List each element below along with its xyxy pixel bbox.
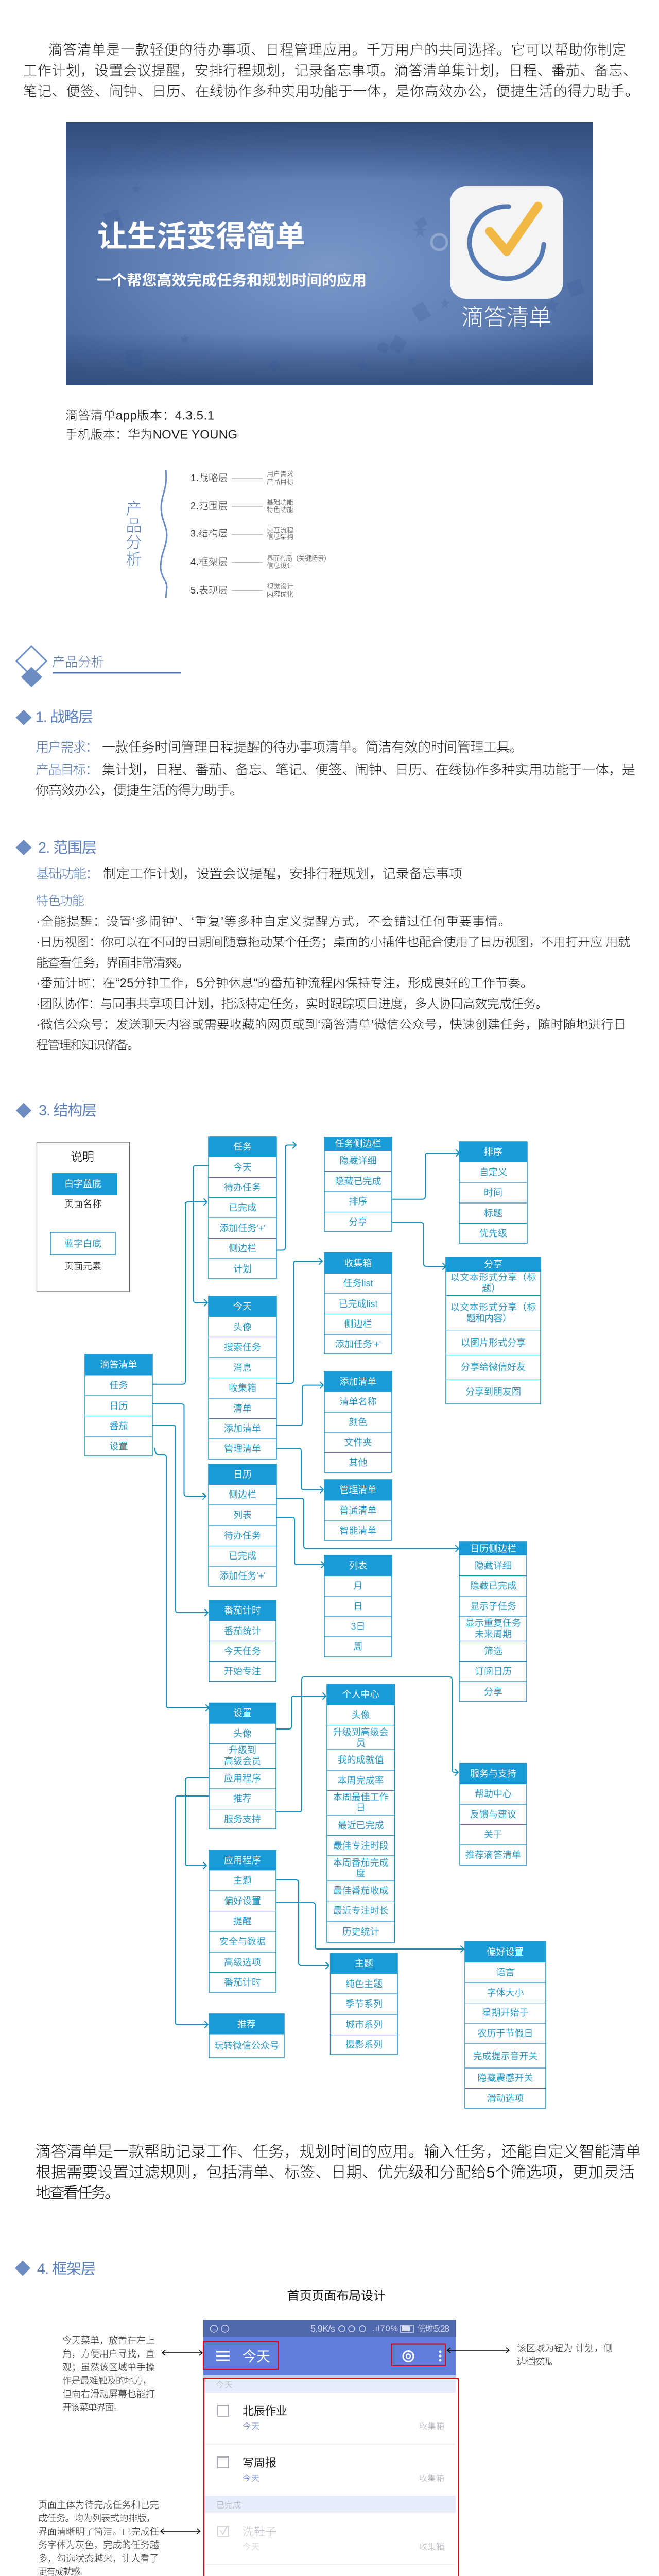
box: 服务与支持: 关于 xyxy=(484,1829,502,1840)
text: 范围层 content: 特色功能 xyxy=(36,894,84,908)
more dots xyxy=(439,2350,442,2362)
annotation: 页面主体: 页面主体为待完成任务和已完 xyxy=(38,2500,159,2510)
box: 排序: 优先级 xyxy=(479,1228,507,1239)
box: 设置: 升级到 xyxy=(229,1745,256,1755)
paragraph: 结构层 summary xyxy=(36,2143,641,2202)
box: 服务与支持: 反馈与建议 xyxy=(470,1809,516,1820)
box: 服务与支持 xyxy=(460,1764,527,1865)
box: 个人中心: 最近专注时长 xyxy=(333,1906,389,1916)
title: 首页页面布局设计: 首页页面布局设计 xyxy=(287,2289,386,2303)
intro paragraph xyxy=(23,42,639,99)
box: 日历侧边栏: 分享 xyxy=(484,1687,502,1697)
box: 个人中心: 日 xyxy=(356,1803,366,1813)
box: 番茄计时 xyxy=(209,1600,276,1682)
arrow: 页面主体 xyxy=(161,2529,200,2534)
box: 个人中心: 度 xyxy=(356,1869,366,1879)
box: 任务侧边栏: 任务侧边栏 xyxy=(335,1139,381,1149)
box: 推荐: 推荐 xyxy=(237,2019,256,2029)
box: 应用程序: 安全与数据 xyxy=(219,1937,266,1947)
text: 范围层 content: 制定工作计划，设置会议提醒，安排行程规划，记录备忘事项 xyxy=(103,866,462,882)
version info: 手机版本：华为NOVE YOUNG xyxy=(65,428,237,442)
box: 番茄计时: 番茄统计 xyxy=(224,1626,261,1636)
arrow: 计划按钮 xyxy=(447,2348,509,2353)
box: 推荐 xyxy=(209,2014,284,2058)
box: 添加清单 xyxy=(324,1371,392,1472)
app icon xyxy=(450,186,563,299)
box: 收集箱: 侧边栏 xyxy=(344,1319,372,1329)
box: 任务侧边栏: 隐藏详细 xyxy=(340,1156,377,1166)
phone: home page: 今天 xyxy=(242,2349,270,2365)
text: 战略层 content: 一款任务时间管理日程提醒的待办事项清单。简洁有效的时间管理工具。 xyxy=(102,739,523,755)
box: 添加清单: 添加清单 xyxy=(340,1377,377,1387)
box: 排序 xyxy=(459,1142,527,1243)
tree items: 交互流程 xyxy=(267,527,293,534)
annotation: 今天菜单: 角，方便用户寻找，直 xyxy=(62,2349,155,2359)
box: 排序: 时间 xyxy=(484,1188,502,1198)
box: 分享: 分享 xyxy=(484,1259,502,1269)
tree items: 信息设计 xyxy=(267,562,293,570)
tree items: 特色功能 xyxy=(267,506,293,513)
tree items: 用户需求 xyxy=(267,470,293,478)
box: 个人中心: 最佳番茄收成 xyxy=(333,1886,389,1896)
box: 主题: 摄影系列 xyxy=(345,2040,383,2050)
text: 战略层 content: 集计划，日程、番茄、备忘、笔记、便签、闹钟、日历、在线协作多种实用功能于一体，是 xyxy=(102,762,635,777)
tree items: 1.战略层 xyxy=(190,473,228,483)
box: 番茄计时: 番茄计时 xyxy=(224,1605,261,1616)
legend box: 说明 xyxy=(71,1150,94,1163)
box: 设置: 推荐 xyxy=(233,1793,252,1804)
highlight boxes xyxy=(203,2342,458,2576)
box: 主题 xyxy=(331,1953,397,2055)
box: 偏好设置: 滑动选项 xyxy=(487,2093,524,2104)
box: 个人中心: 员 xyxy=(356,1738,366,1748)
task: 写周报: 写周报 xyxy=(242,2456,276,2469)
task: 写周报 xyxy=(218,2456,444,2483)
box: 添加清单: 清单名称 xyxy=(340,1397,377,1407)
box: 设置: 头像 xyxy=(233,1728,252,1739)
box: 个人中心: 升级到高级会 xyxy=(333,1727,389,1737)
status bar: .ıl70% xyxy=(372,2325,398,2333)
vertical title xyxy=(126,500,142,569)
box: 偏好设置: 隐藏震感开关 xyxy=(478,2073,533,2083)
text: 范围层 content: 基础功能： xyxy=(36,866,99,882)
annotation: 页面主体: 多，勾选状态越来，让人看了 xyxy=(38,2553,159,2564)
box: 个人中心 xyxy=(327,1684,394,1942)
box: 任务: 添加任务'+' xyxy=(219,1223,266,1233)
text: 范围层 content: ·团队协作：与同事共享项目计划，指派特定任务，实时跟踪项目进度，多人协同高效完成任务。 xyxy=(36,997,548,1011)
box: 个人中心: 我的成就值 xyxy=(338,1755,384,1765)
intro paragraph: 笔记、便签、闹钟、日历、在线协作多种实用功能于一体，是你高效办公，便捷生活的得力助手。 xyxy=(23,83,639,99)
tree items: 信息架构 xyxy=(267,533,293,541)
box: 设置: 高级会员 xyxy=(224,1756,261,1767)
box: 主题: 纯色主题 xyxy=(345,1979,383,1989)
text: 范围层 content: ·日历视图：你可以在不同的日期间随意拖动某个任务；桌面的小插件也配合使用了日历视图，不用打开应 用就 xyxy=(36,936,630,949)
banner title: 让生活变得简单 xyxy=(97,219,305,253)
box: 滴答清单 root xyxy=(85,1354,152,1456)
box: 分享: 题） xyxy=(482,1283,500,1293)
hero banner xyxy=(66,122,593,385)
box: 管理清单 xyxy=(324,1480,392,1540)
box: 滴答清单 root: 滴答清单 xyxy=(100,1360,137,1370)
box: 列表: 周 xyxy=(353,1641,362,1652)
heading: 2. 范围层: 2. 范围层 xyxy=(38,839,97,856)
box: 任务: 侧边栏 xyxy=(229,1243,256,1253)
box: 应用程序: 应用程序 xyxy=(224,1855,261,1866)
box: 个人中心: 头像 xyxy=(352,1710,370,1720)
annotation: 计划按钮: 该区域为钮为 计划，侧 xyxy=(517,2343,613,2353)
app name: 滴答清单 xyxy=(461,305,551,330)
box: 番茄计时: 开始专注 xyxy=(224,1666,261,1676)
product analysis tree xyxy=(126,470,331,598)
box: 管理清单: 管理清单 xyxy=(340,1485,377,1495)
box: 个人中心: 本周番茄完成 xyxy=(333,1858,389,1868)
box: 列表 xyxy=(324,1555,392,1657)
task: 北辰作业: 今天 xyxy=(242,2421,259,2431)
box: 推荐: 玩转微信公众号 xyxy=(214,2041,279,2051)
box: 管理清单: 智能清单 xyxy=(340,1526,377,1536)
box: 偏好设置: 语言 xyxy=(496,1967,515,1977)
connectors xyxy=(151,1142,464,2028)
menu icon xyxy=(216,2352,230,2360)
box: 个人中心: 历史统计 xyxy=(342,1927,379,1937)
box: 个人中心: 个人中心 xyxy=(342,1689,379,1700)
box: 任务侧边栏 xyxy=(324,1137,392,1232)
box: 设置: 设置 xyxy=(233,1708,252,1718)
tree items: 产品目标 xyxy=(267,478,293,485)
box: 应用程序: 主题 xyxy=(233,1875,252,1886)
box: 主题: 城市系列 xyxy=(345,2020,383,2030)
tree items: 基础功能 xyxy=(267,499,293,506)
annotation: 今天菜单: 观；虽然该区域单手操 xyxy=(62,2362,155,2372)
paragraph: 结构层 summary: 地查看任务。 xyxy=(36,2184,120,2202)
tree items: 视觉设计 xyxy=(267,582,293,590)
heading: 产品分析: 产品分析 xyxy=(52,655,104,670)
intro paragraph: 滴答清单是一款轻便的待办事项、日程管理应用。千万用户的共同选择。它可以帮助你制定 xyxy=(48,42,626,58)
box: 日历: 已完成 xyxy=(229,1551,256,1561)
text: 范围层 content: ·微信公众号：发送聊天内容或需要收藏的网页或到‘滴答清单’微信公众号，快速创建任务，随时随地进行日 xyxy=(36,1018,626,1031)
box: 日历: 侧边栏 xyxy=(229,1489,256,1500)
box: 应用程序 xyxy=(209,1850,276,1992)
text: 范围层 content: 程管理和知识储备。 xyxy=(36,1039,140,1052)
annotation: 今天菜单: 但向右滑动屏幕也能打 xyxy=(62,2389,155,2399)
heading: 1. 战略层: 1. 战略层 xyxy=(36,709,93,726)
tree items: 5.表现层 xyxy=(190,585,228,596)
box: 日历侧边栏: 订阅日历 xyxy=(475,1666,512,1676)
box: 列表: 列表 xyxy=(349,1561,368,1571)
text: 范围层 content: ·全能提醒：设置‘多闹钟’、‘重复’等多种自定义提醒方式，不会错过任何重要事情。 xyxy=(36,915,511,928)
box: 排序: 标题 xyxy=(484,1208,502,1218)
box: 滴答清单 root: 日历 xyxy=(109,1401,128,1411)
box: 今天 xyxy=(209,1296,276,1459)
box: 分享: 以文本形式分享（标 xyxy=(450,1302,536,1313)
legend box: 蓝字白底 xyxy=(64,1239,101,1249)
paragraph: 结构层 summary: 滴答清单是一款帮助记录工作、任务，规划时间的应用。输入任务，还能自定义智能清单 xyxy=(36,2143,641,2161)
box: 日历: 待办任务 xyxy=(224,1531,261,1541)
box: 分享: 以文本形式分享（标 xyxy=(450,1273,536,1283)
box: 列表: 3日 xyxy=(351,1621,366,1632)
box: 排序: 排序 xyxy=(484,1147,502,1157)
tree items: 内容优化 xyxy=(267,590,293,598)
box: 收集箱: 添加任务'+' xyxy=(335,1339,381,1349)
box: 偏好设置: 农历于节假日 xyxy=(478,2028,533,2039)
box: 滴答清单 root: 番茄 xyxy=(109,1421,128,1431)
heading: 3. 结构层: 3. 结构层 xyxy=(39,1102,97,1119)
box: 任务: 计划 xyxy=(233,1264,252,1274)
task: 北辰作业: 北辰作业 xyxy=(242,2405,287,2417)
box: 今天: 收集箱 xyxy=(229,1383,256,1393)
box: 任务: 待办任务 xyxy=(224,1182,261,1193)
legend box xyxy=(37,1142,130,1292)
version info: 滴答清单app版本：4.3.5.1 xyxy=(65,409,214,422)
annotation: 今天菜单: 开该菜单界面。 xyxy=(62,2402,123,2413)
box: 任务侧边栏: 隐藏已完成 xyxy=(335,1176,381,1187)
box: 服务与支持: 帮助中心 xyxy=(475,1789,512,1799)
text: 范围层 content xyxy=(36,866,630,1052)
box: 个人中心: 本周完成率 xyxy=(338,1775,384,1786)
box: 偏好设置: 字体大小 xyxy=(487,1988,524,1998)
annotation: 计划按钮 xyxy=(517,2343,613,2367)
box: 添加清单: 颜色 xyxy=(349,1417,368,1427)
box: 服务与支持: 推荐滴答清单 xyxy=(465,1850,521,1860)
intro paragraph: 工作计划，设置会议提醒，安排行程规划，记录备忘事项。滴答清单集计划，日程、番茄、备忘、 xyxy=(23,63,637,78)
box: 设置: 服务支持 xyxy=(224,1814,261,1824)
box: 滴答清单 root: 任务 xyxy=(109,1380,128,1391)
task: 洗鞋子: 收集箱 xyxy=(419,2542,444,2551)
box: 偏好设置: 偏好设置 xyxy=(487,1947,524,1957)
box: 应用程序: 提醒 xyxy=(233,1916,252,1926)
box: 分享: 以图片形式分享 xyxy=(461,1337,526,1348)
box: 收集箱: 任务list xyxy=(343,1278,373,1289)
box: 任务: 已完成 xyxy=(229,1202,256,1213)
vertical title: 分 xyxy=(126,534,142,551)
box: 应用程序: 番茄计时 xyxy=(224,1977,261,1988)
tree items: 2.范围层 xyxy=(190,501,228,511)
box: 日历侧边栏: 隐藏已完成 xyxy=(470,1581,516,1591)
box: 个人中心: 本周最佳工作 xyxy=(333,1792,389,1803)
box: 日历侧边栏: 显示子任务 xyxy=(470,1601,516,1612)
annotation: 页面主体: 界面清晰明了简洁。已完成任 xyxy=(38,2527,159,2537)
box: 分享: 分享给微信好友 xyxy=(461,1362,526,1372)
box: 收集箱: 已完成list xyxy=(339,1299,378,1309)
vertical title: 产 xyxy=(126,500,142,518)
box: 列表: 日 xyxy=(353,1601,362,1612)
box: 个人中心: 最近已完成 xyxy=(338,1820,384,1831)
heading: 产品分析 xyxy=(16,646,181,687)
legend box: 白字蓝底 xyxy=(64,1179,101,1189)
annotation: 页面主体: 务字体为灰色，完成的任务越 xyxy=(38,2540,159,2550)
box: 添加清单: 其他 xyxy=(349,1458,368,1468)
box: 任务 xyxy=(209,1137,276,1279)
box: 任务侧边栏: 分享 xyxy=(349,1217,368,1227)
box: 列表: 月 xyxy=(353,1581,362,1591)
magnifier decoration xyxy=(431,234,447,250)
vertical title: 析 xyxy=(126,550,142,569)
box: 收集箱 xyxy=(324,1253,392,1354)
status bar: 5.9K/s xyxy=(310,2324,335,2334)
box: 个人中心: 最佳专注时段 xyxy=(333,1841,389,1851)
task: 写周报: 收集箱 xyxy=(419,2474,444,2483)
annotation: 今天菜单: 今天菜单，放置在左上 xyxy=(62,2335,155,2346)
task: 洗鞋子: 洗鞋子 xyxy=(242,2526,276,2538)
box: 日历侧边栏: 显示重复任务 xyxy=(465,1618,521,1628)
task: 写周报: 今天 xyxy=(242,2474,259,2483)
status bar xyxy=(210,2324,449,2334)
box: 今天: 管理清单 xyxy=(224,1444,261,1454)
arrow: 今天菜单 xyxy=(162,2350,202,2355)
box: 今天: 清单 xyxy=(233,1403,252,1414)
annotation: 今天菜单: 作是最难触及的地方， xyxy=(62,2376,152,2386)
heading: 4. 框架层: 4. 框架层 xyxy=(37,2261,96,2277)
box: 日历侧边栏: 筛选 xyxy=(484,1646,502,1656)
text: 战略层 content: 用户需求： xyxy=(36,739,98,755)
box: 今天: 添加清单 xyxy=(224,1423,261,1434)
brace xyxy=(161,470,167,598)
status bar: 傍晚5:28 xyxy=(417,2324,449,2334)
box: 添加清单: 文件夹 xyxy=(344,1437,372,1448)
box: 番茄计时: 今天任务 xyxy=(224,1646,261,1656)
banner subtitle: 一个帮您高效完成任务和规划时间的应用 xyxy=(97,272,367,289)
box: 日历 xyxy=(209,1464,276,1586)
task: 北辰作业 xyxy=(218,2405,444,2431)
text: 战略层 content xyxy=(36,739,635,798)
box: 今天: 头像 xyxy=(233,1322,252,1332)
box: 日历: 日历 xyxy=(233,1469,252,1480)
text: 战略层 content: 产品目标： xyxy=(36,762,98,777)
annotation: 页面主体: 成任务。均为列表式的排版， xyxy=(38,2513,155,2523)
box: 今天: 今天 xyxy=(233,1301,252,1312)
box: 主题: 主题 xyxy=(355,1958,373,1969)
box: 服务与支持: 服务与支持 xyxy=(470,1769,516,1779)
today section bar xyxy=(204,2380,456,2393)
phone: home page: 已完成 xyxy=(216,2501,241,2510)
box: 日历侧边栏 xyxy=(459,1542,527,1702)
box: 分享: 题和内容） xyxy=(466,1313,512,1324)
box: 偏好设置: 星期开始于 xyxy=(482,2008,528,2018)
heading: 3. 结构层 xyxy=(16,1102,97,1119)
box: 日历侧边栏: 日历侧边栏 xyxy=(470,1544,516,1554)
phone: home page xyxy=(203,2320,458,2576)
task: 洗鞋子: 今天 xyxy=(242,2542,259,2551)
tree items: 界面布局（关键场景） xyxy=(267,554,331,563)
box: 设置: 应用程序 xyxy=(224,1773,261,1784)
box: 收集箱: 收集箱 xyxy=(344,1258,372,1268)
box: 日历: 列表 xyxy=(233,1510,252,1520)
legend box: 页面元素 xyxy=(64,1261,101,1272)
annotation: 页面主体 xyxy=(38,2500,159,2576)
box: 管理清单: 普通清单 xyxy=(340,1505,377,1516)
version info xyxy=(65,409,237,442)
box: 日历: 添加任务'+' xyxy=(219,1571,266,1581)
box: 偏好设置: 完成提示音开关 xyxy=(473,2051,537,2061)
box: 分享: 分享到朋友圈 xyxy=(465,1386,521,1397)
tree items xyxy=(190,470,331,598)
box: 任务侧边栏: 排序 xyxy=(349,1196,368,1207)
box: 设置 xyxy=(209,1703,276,1829)
annotation: 计划按钮: 边栏按钮。 xyxy=(517,2357,558,2367)
box: 偏好设置 xyxy=(465,1942,546,2108)
text: 范围层 content: ·番茄计时：在“25分钟工作，5分钟休息”的番茄钟流程内保持专注，形成良好的工作节奏。 xyxy=(36,976,533,990)
legend box: 页面名称 xyxy=(64,1199,101,1209)
annotation: 今天菜单 xyxy=(62,2335,155,2413)
box: 今天: 搜索任务 xyxy=(224,1342,261,1352)
text: 范围层 content: 能查看任务，界面非常清爽。 xyxy=(36,956,189,970)
box: 应用程序: 偏好设置 xyxy=(224,1896,261,1906)
box: 排序: 自定义 xyxy=(479,1167,507,1178)
box: 日历侧边栏: 隐藏详细 xyxy=(475,1561,512,1571)
vertical title: 品 xyxy=(126,517,142,535)
task: 洗鞋子 xyxy=(218,2526,444,2551)
box: 任务: 任务 xyxy=(233,1142,252,1152)
tree items: 4.框架层 xyxy=(190,557,228,567)
target icon xyxy=(403,2351,413,2362)
box: 滴答清单 root: 设置 xyxy=(109,1441,128,1451)
completed section bar xyxy=(204,2496,456,2513)
box: 今天: 消息 xyxy=(233,1363,252,1373)
box: 日历侧边栏: 未来周期 xyxy=(475,1629,512,1639)
box: 分享 xyxy=(446,1258,541,1404)
text: 战略层 content: 你高效办公，便捷生活的得力助手。 xyxy=(36,783,243,798)
paragraph: 结构层 summary: 根据需要设置过滤规则，包括清单、标签、日期、优先级和分配给5个筛选项，更加灵活 xyxy=(36,2164,635,2181)
phone: home page: 今天 xyxy=(216,2380,233,2389)
tree items: 3.结构层 xyxy=(190,529,228,539)
task: 北辰作业: 收集箱 xyxy=(419,2421,444,2431)
box: 主题: 季节系列 xyxy=(345,1999,383,2009)
box: 任务: 今天 xyxy=(233,1162,252,1173)
decorative icons on banner xyxy=(103,183,584,373)
box: 应用程序: 高级选项 xyxy=(224,1957,261,1968)
